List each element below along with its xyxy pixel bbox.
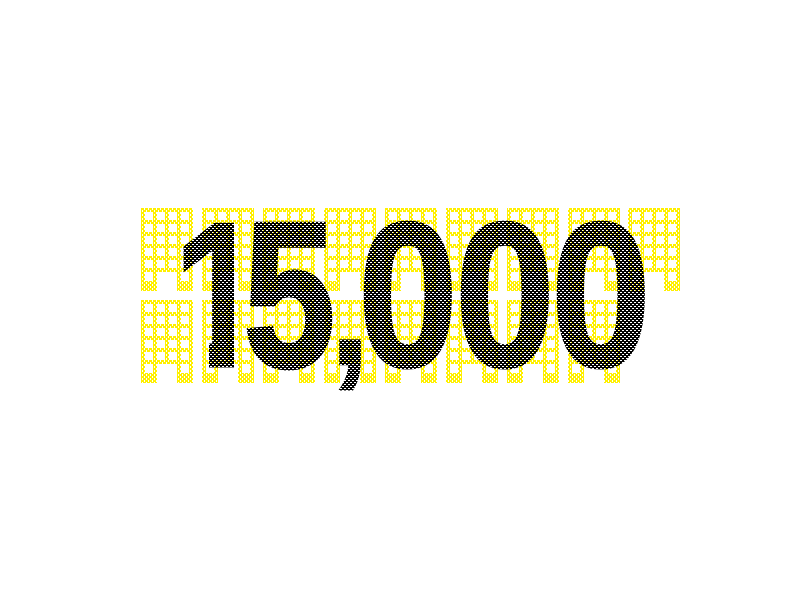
big number: 15,000: , <box>330 218 370 400</box>
big number: 15,000: 0 <box>551 179 651 410</box>
building row 1 <box>141 208 680 291</box>
big number: 15,000: 0 <box>358 179 458 410</box>
building row 2 <box>141 300 620 383</box>
big number: 15,000: 1 <box>173 181 269 410</box>
big number: 15,000: 0 <box>455 179 555 410</box>
buildings: pictogram grid <box>141 208 680 383</box>
big number: 15,000 <box>184 220 645 390</box>
big number: 15,000: 5 <box>244 181 335 410</box>
